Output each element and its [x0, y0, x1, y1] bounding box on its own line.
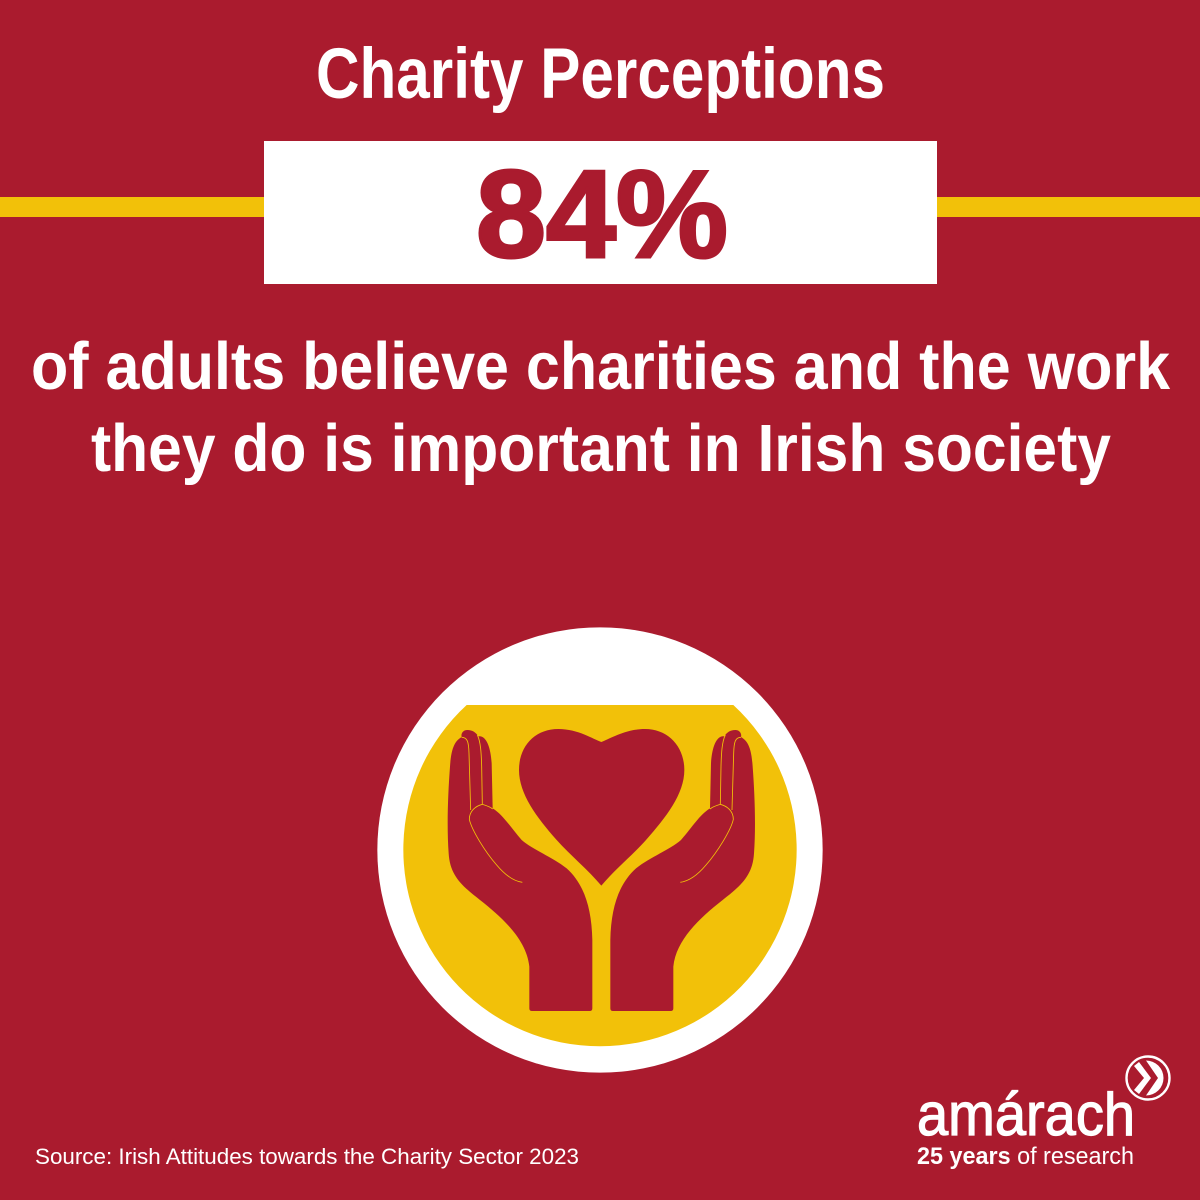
statement text: they do is important in Irish society	[91, 411, 1111, 486]
icon: left hand	[448, 730, 592, 1011]
logo wordmark: amárach	[917, 1081, 1135, 1148]
right accent bar	[937, 197, 1200, 217]
logo tagline: 25 years of research	[917, 1143, 1134, 1170]
logo icon: chevron circle	[1126, 1056, 1170, 1100]
statistic box	[264, 141, 937, 284]
title: Charity Perceptions	[316, 35, 885, 114]
source note: Source: Irish Attitudes towards the Charity Sector 2023	[35, 1144, 579, 1169]
left accent bar	[0, 197, 264, 217]
icon: hands holding heart	[377, 627, 823, 1073]
logo: amarach	[917, 1056, 1170, 1170]
icon: heart	[519, 729, 684, 886]
icon: right hand	[610, 730, 755, 1011]
statement text	[31, 329, 1171, 486]
statistic value: 84%	[476, 146, 728, 284]
